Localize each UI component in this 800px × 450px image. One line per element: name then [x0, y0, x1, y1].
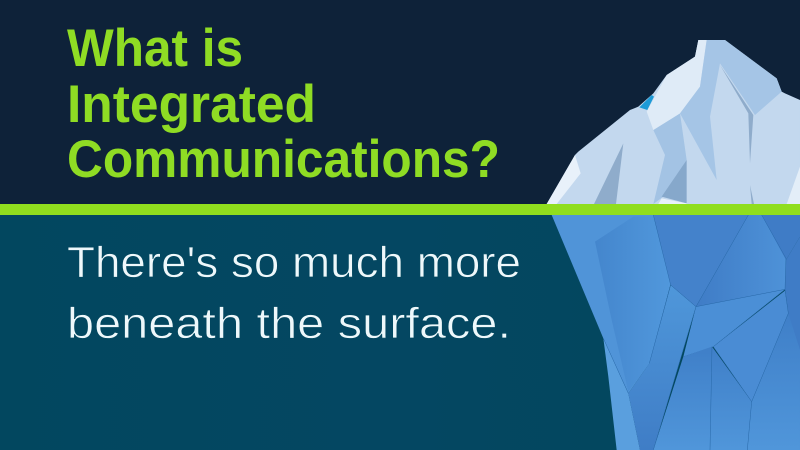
background: sky panel: [0, 0, 800, 205]
iceberg above water: [547, 40, 800, 204]
title: What is: [67, 19, 243, 78]
iceberg below water: [552, 215, 800, 450]
title: [67, 19, 500, 189]
subtitle: There's so much more: [67, 238, 521, 287]
green waterline bar: [0, 204, 800, 215]
title: Communications?: [67, 130, 500, 189]
background: water panel: [0, 210, 800, 450]
subtitle: [67, 238, 521, 348]
title: Integrated: [67, 75, 316, 134]
subtitle: beneath the surface.: [67, 299, 511, 348]
